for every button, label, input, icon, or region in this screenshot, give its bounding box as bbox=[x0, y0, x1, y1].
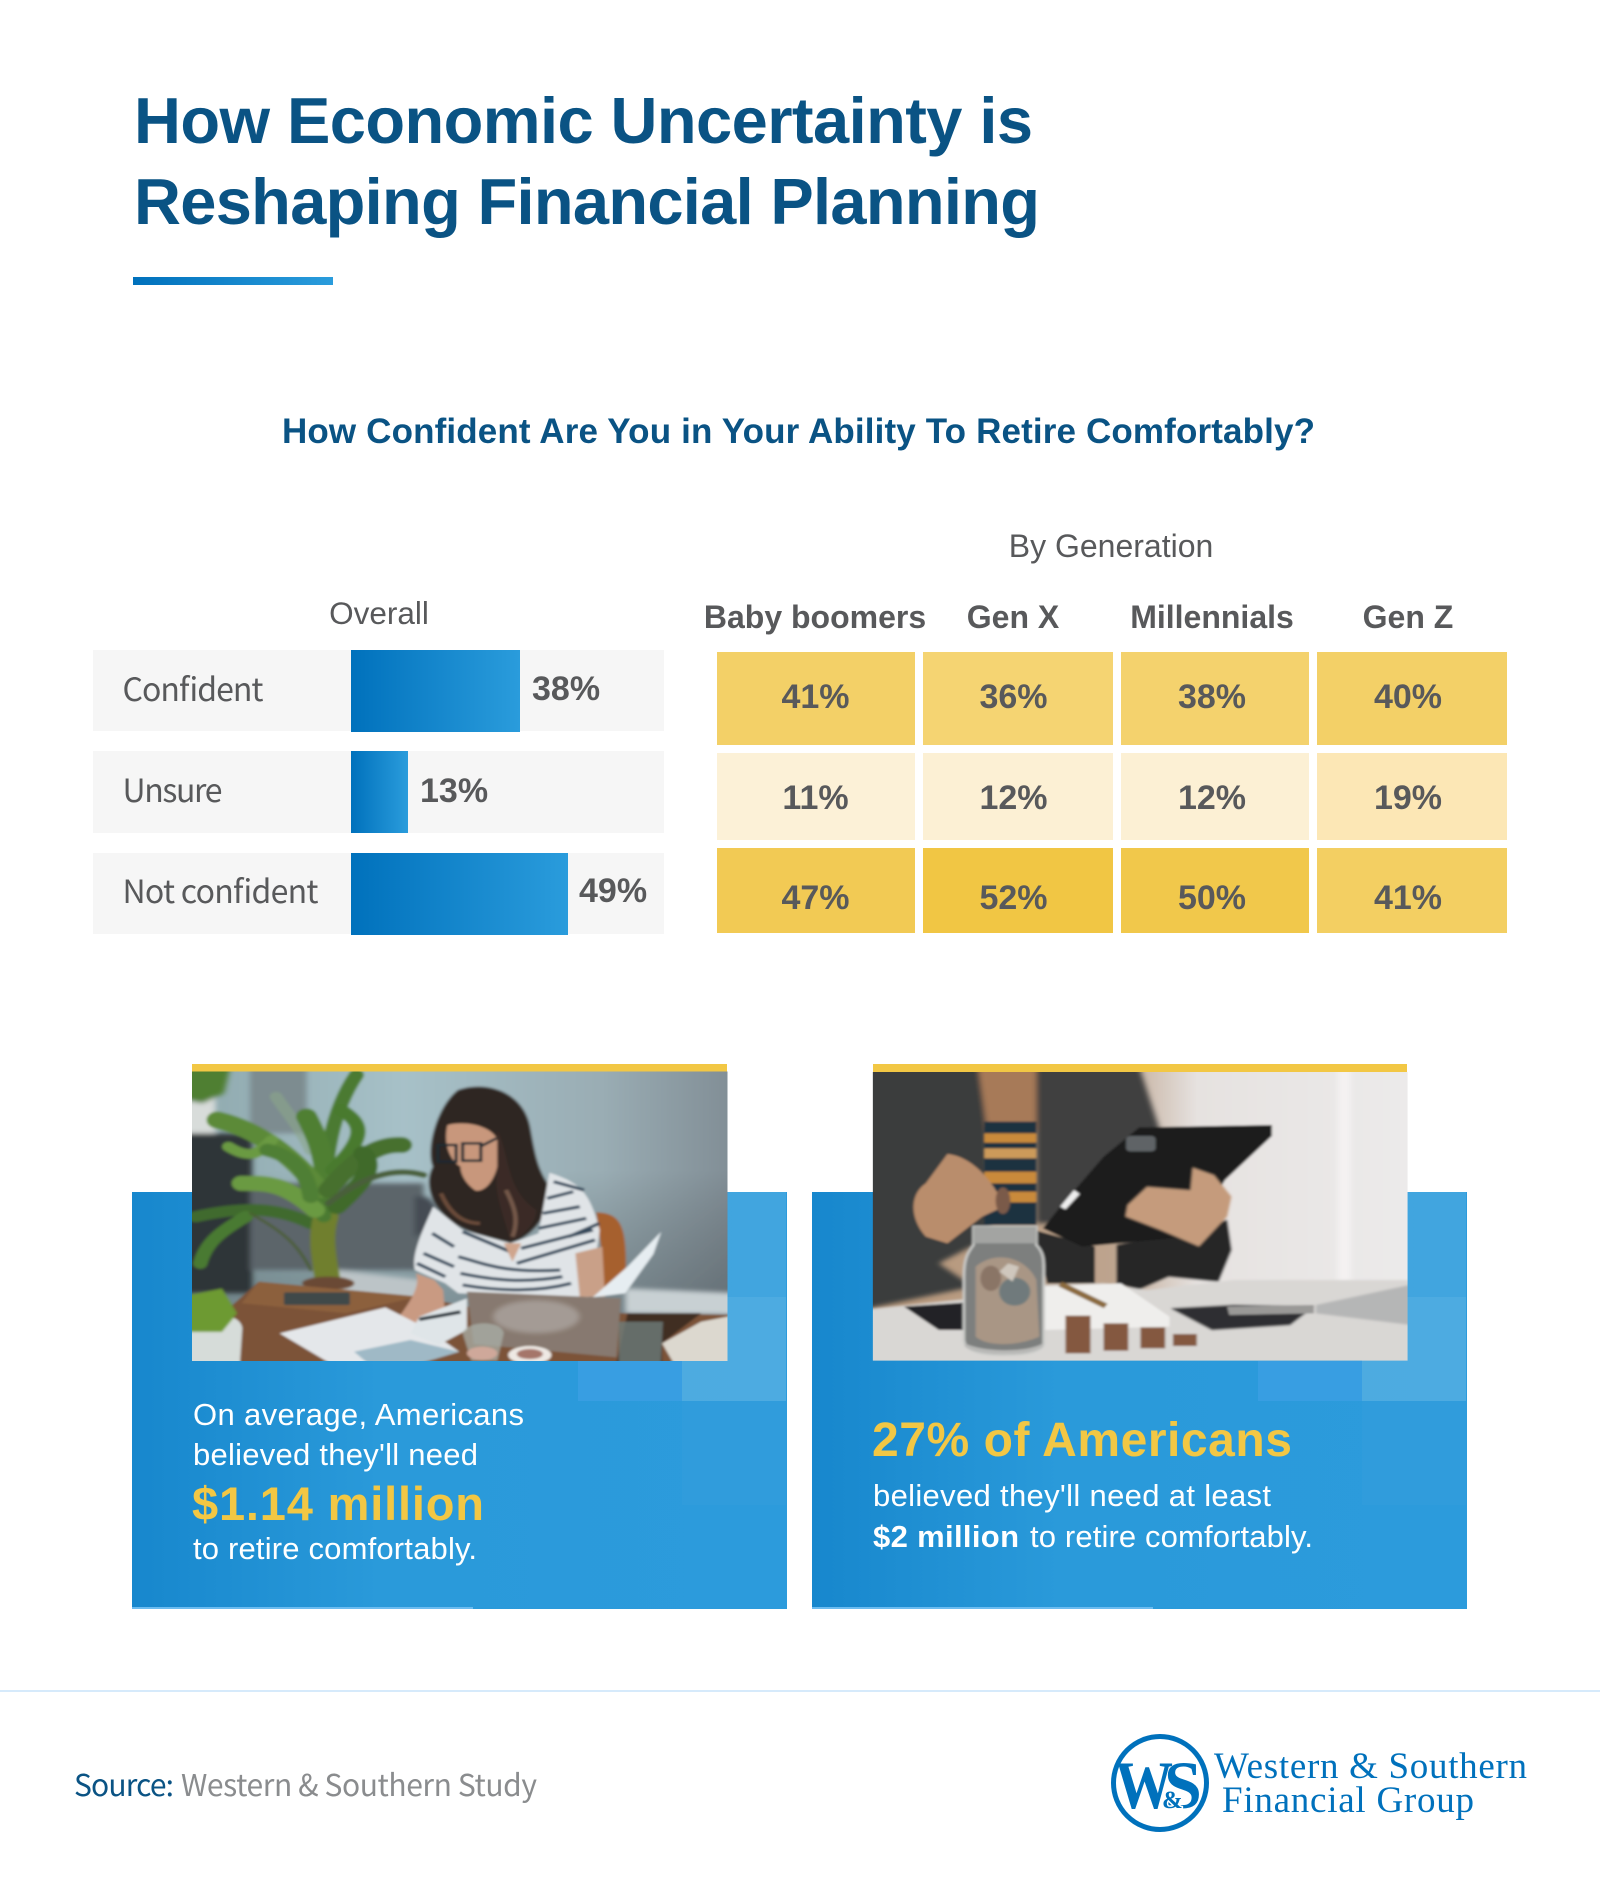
title underline bbox=[133, 277, 333, 285]
laptop bbox=[467, 1292, 621, 1357]
section heading: How Confident Are You in Your Ability To Retire Comfortably? bbox=[282, 412, 1315, 451]
heat values: 36% bbox=[979, 678, 1048, 716]
row: confident: Confident bbox=[122, 665, 264, 711]
heat values: 50% bbox=[1178, 879, 1246, 917]
footer divider bbox=[0, 1690, 1600, 1692]
heat values: 12% bbox=[979, 779, 1048, 817]
left hand bbox=[914, 1154, 1004, 1243]
heat values bbox=[781, 678, 1442, 917]
heat values: 19% bbox=[1374, 779, 1442, 817]
panel: card left bbox=[132, 1060, 787, 1609]
papers bbox=[278, 1306, 460, 1361]
card left text: believed they'll need bbox=[193, 1437, 478, 1472]
logo mark bbox=[1114, 1736, 1206, 1830]
heat values: 38% bbox=[1178, 678, 1246, 716]
logo bbox=[1114, 1736, 1527, 1830]
desk bbox=[231, 1282, 728, 1361]
panel: overall chart bbox=[93, 595, 664, 935]
card background bbox=[812, 1192, 1467, 1609]
table bbox=[872, 1280, 1408, 1361]
overall label: Overall bbox=[329, 595, 429, 631]
row: confident bbox=[93, 650, 664, 732]
heat values: 40% bbox=[1374, 678, 1442, 716]
source note: Source: bbox=[74, 1761, 174, 1805]
panel: by generation table bbox=[704, 528, 1507, 933]
right hand bbox=[1125, 1167, 1232, 1247]
card left text: to retire comfortably. bbox=[193, 1531, 477, 1566]
logo mark: S bbox=[1164, 1747, 1202, 1823]
column headers: Baby boomers bbox=[704, 599, 926, 635]
heat cells bbox=[717, 652, 1507, 933]
heat values: 41% bbox=[1374, 879, 1442, 917]
row: confident: 38% bbox=[532, 670, 600, 708]
photo: woman reviewing papers at desk bbox=[192, 1072, 728, 1361]
held paper bbox=[593, 1232, 661, 1297]
face and hair strands bbox=[446, 1123, 497, 1191]
card left text bbox=[192, 1397, 524, 1566]
row: unsure: 13% bbox=[420, 772, 488, 810]
heat values: 12% bbox=[1178, 779, 1246, 817]
logo wordmark bbox=[1214, 1746, 1527, 1821]
card right text: to retire comfortably. bbox=[1030, 1519, 1313, 1554]
yellow top bar bbox=[192, 1064, 727, 1072]
striped top bbox=[984, 1122, 1036, 1225]
phone bbox=[904, 1303, 964, 1330]
card right text: 27% of Americans bbox=[872, 1414, 1292, 1467]
glass bbox=[463, 1323, 504, 1361]
card background bbox=[132, 1192, 787, 1609]
yellow top bar bbox=[873, 1064, 1407, 1072]
row: not confident bbox=[93, 853, 664, 935]
shirt bbox=[414, 1173, 600, 1297]
by generation label: By Generation bbox=[1009, 528, 1213, 564]
row: not confident: Not confident bbox=[122, 867, 318, 913]
coin stacks bbox=[1065, 1316, 1197, 1353]
column headers: Gen X bbox=[967, 599, 1060, 635]
lower jacket bbox=[1034, 1230, 1095, 1283]
heat values: 47% bbox=[781, 879, 850, 917]
cup bbox=[508, 1346, 552, 1364]
card right text: $2 million bbox=[873, 1519, 1019, 1554]
title: Reshaping Financial Planning bbox=[134, 165, 1040, 238]
heat values: 41% bbox=[781, 678, 850, 716]
photo: hands adding coins to jar with tablet bbox=[872, 1072, 1408, 1361]
laptop bbox=[1315, 1284, 1408, 1326]
small plant and pot bbox=[192, 1316, 244, 1361]
title: How Economic Uncertainty is bbox=[134, 84, 1033, 157]
water glass bbox=[619, 1322, 663, 1370]
arms bbox=[392, 1273, 446, 1333]
card right text bbox=[872, 1414, 1313, 1554]
card left text: On average, Americans bbox=[193, 1397, 524, 1432]
jar bbox=[964, 1227, 1044, 1355]
card left text: $1.14 million bbox=[192, 1477, 484, 1530]
book bbox=[660, 1315, 728, 1361]
tablet bbox=[1043, 1125, 1272, 1247]
logo mark: & bbox=[1162, 1787, 1183, 1814]
chair bbox=[595, 1211, 628, 1287]
title bbox=[134, 84, 1040, 238]
woman hair bbox=[429, 1087, 549, 1243]
logo wordmark: Western & Southern bbox=[1214, 1746, 1527, 1787]
column headers: Gen Z bbox=[1363, 599, 1453, 635]
heat values: 11% bbox=[782, 779, 849, 817]
logo wordmark: Financial Group bbox=[1222, 1780, 1474, 1821]
source note: Western & Southern Study bbox=[181, 1761, 537, 1805]
calculator bbox=[1171, 1305, 1314, 1330]
heat values: 52% bbox=[979, 879, 1048, 917]
row: unsure: Unsure bbox=[122, 766, 222, 812]
column headers: Millennials bbox=[1130, 599, 1294, 635]
logo mark: W bbox=[1115, 1747, 1173, 1823]
card right text: believed they'll need at least bbox=[873, 1478, 1271, 1513]
column headers bbox=[704, 599, 1453, 635]
row: unsure bbox=[93, 751, 664, 833]
row: not confident: 49% bbox=[579, 872, 647, 910]
phone bbox=[284, 1292, 350, 1305]
plant bbox=[196, 1075, 424, 1283]
panel: card right bbox=[812, 1060, 1467, 1609]
notebook and pen bbox=[1043, 1283, 1169, 1330]
